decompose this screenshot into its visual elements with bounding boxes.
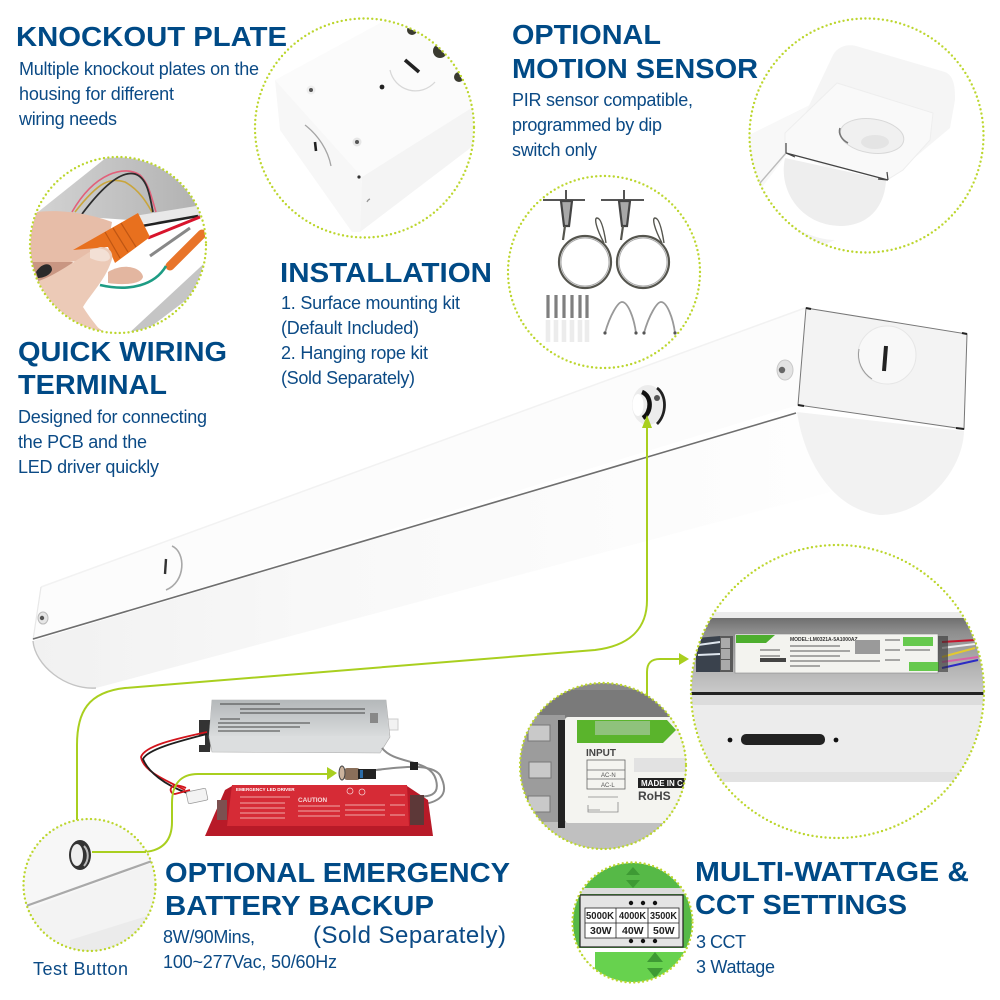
fixture housing [33, 308, 805, 639]
panel: driver close-up photo: MODEL:LM0321A-5A1000AZ [790, 637, 858, 643]
wall anchors [548, 320, 587, 342]
text: installation list: 2. Hanging rope kit [281, 343, 428, 363]
text: knockout plate description: Multiple knockout plates on the [19, 59, 259, 79]
panel: CCT switch photo: 40W [622, 925, 644, 937]
text: sold separately note: (Sold Separately) [313, 922, 506, 949]
diffuser end cap [797, 412, 964, 515]
emergency driver red box: EMERGENCY LED DRIVER [236, 787, 295, 792]
text: quick wiring description: the PCB and the [18, 432, 147, 452]
title: multi-wattage and CCT settings: MULTI-WATTAGE & [695, 856, 969, 887]
text: CCT and wattage list: 3 CCT [696, 932, 746, 952]
title: quick wiring terminal: TERMINAL [18, 369, 167, 400]
label: test button: Test Button [33, 959, 128, 979]
left terminals [696, 636, 720, 672]
text: quick wiring description: LED driver quickly [18, 457, 159, 477]
driver label [735, 634, 938, 673]
mounting screws [548, 295, 587, 318]
title: optional emergency battery backup: OPTIONAL EMERGENCY [165, 857, 510, 888]
text: emergency backup specs: 100~277Vac, 50/60Hz [163, 952, 337, 972]
green leader from test button circle to part [92, 767, 337, 852]
housing seam [33, 413, 796, 639]
text: knockout plate description: housing for different [19, 84, 174, 104]
driver label [565, 717, 690, 823]
test button ring [24, 819, 156, 951]
left screw [38, 612, 48, 624]
title: quick wiring terminal: QUICK WIRING [18, 336, 227, 367]
title: optional emergency battery backup: BATTERY BACKUP [165, 890, 434, 921]
panel: CCT switch photo: 50W [653, 925, 675, 937]
emergency driver red box: CAUTION [298, 797, 327, 804]
panel: CCT switch photo [570, 860, 695, 988]
panel: motion sensor photo [745, 18, 984, 255]
knockout on left housing [166, 546, 182, 590]
text: knockout plate description: wiring needs [18, 109, 117, 129]
CCT switch ring [572, 862, 692, 982]
hanging rope kits [543, 190, 669, 288]
settings table [580, 895, 683, 947]
gray harness [376, 748, 444, 804]
test button part [339, 766, 376, 780]
title: optional motion sensor: MOTION SENSOR [512, 53, 758, 84]
side screw [777, 360, 793, 380]
fixture diffuser [33, 412, 830, 688]
driver close-up ring [691, 545, 984, 838]
panel: input terminal photo: INPUT [586, 748, 616, 759]
title: multi-wattage and CCT settings: CCT SETTINGS [695, 889, 907, 920]
bent hooks [605, 302, 675, 333]
text: CCT and wattage list: 3 Wattage [696, 957, 775, 977]
text: quick wiring description: Designed for connecting [18, 407, 207, 427]
slot and rivets [741, 734, 825, 745]
text: installation list: (Default Included) [281, 318, 419, 338]
panel: input terminal photo: RoHS [638, 789, 671, 803]
main LED strip fixture [33, 308, 967, 688]
motion sensor ring [750, 18, 984, 252]
panel: input terminal photo [518, 680, 690, 852]
wire connector [186, 788, 208, 804]
text: installation list: 1. Surface mounting kit [281, 293, 460, 313]
panel: input terminal photo: AC-L [601, 783, 615, 789]
panel: CCT switch photo: 30W [590, 925, 612, 937]
panel: input terminal photo: AC-N [601, 773, 616, 779]
upper finger [30, 211, 112, 262]
panel: CCT switch photo: 4000K [619, 911, 647, 922]
orange connector [73, 213, 150, 263]
emergency driver red box [205, 785, 433, 836]
title: optional motion sensor: OPTIONAL [512, 19, 661, 50]
test button on fixture [632, 385, 664, 425]
red and black wires [141, 732, 207, 794]
green leader to test button [77, 415, 652, 820]
text: motion sensor description: switch only [512, 140, 597, 160]
panel: driver close-up photo [690, 545, 986, 840]
text: installation list: (Sold Separately) [281, 368, 415, 388]
thumb [38, 247, 112, 331]
terminal blocks [528, 725, 551, 812]
panel: test button photo [20, 815, 160, 955]
lower fingers [64, 314, 102, 331]
panel: knockout plate photo [255, 15, 474, 238]
emergency battery backup product photo [141, 700, 444, 836]
text: motion sensor description: programmed by dip [512, 115, 662, 135]
title: installation: INSTALLATION [280, 257, 492, 288]
silver battery pack [199, 700, 398, 753]
right wires [942, 640, 978, 668]
panel: CCT switch photo: 3500K [650, 911, 678, 922]
knockout on end plate [858, 326, 916, 384]
text: motion sensor description: PIR sensor compatible, [512, 90, 693, 110]
green leader to driver close-up [647, 653, 689, 697]
panel: installation kit photo [508, 176, 700, 368]
panel: CCT switch photo: 5000K [586, 911, 615, 922]
knockout plate ring [255, 18, 474, 238]
panel: quick wiring terminal photo [28, 155, 210, 335]
text: emergency backup specs: 8W/90Mins, [163, 927, 255, 947]
installation kit ring [508, 176, 700, 368]
quick wiring ring [30, 157, 206, 333]
panel: input terminal photo: MADE IN C [641, 779, 683, 788]
input terminal ring [520, 683, 686, 849]
title: knockout plate: KNOCKOUT PLATE [16, 21, 287, 52]
end plate [798, 308, 967, 429]
